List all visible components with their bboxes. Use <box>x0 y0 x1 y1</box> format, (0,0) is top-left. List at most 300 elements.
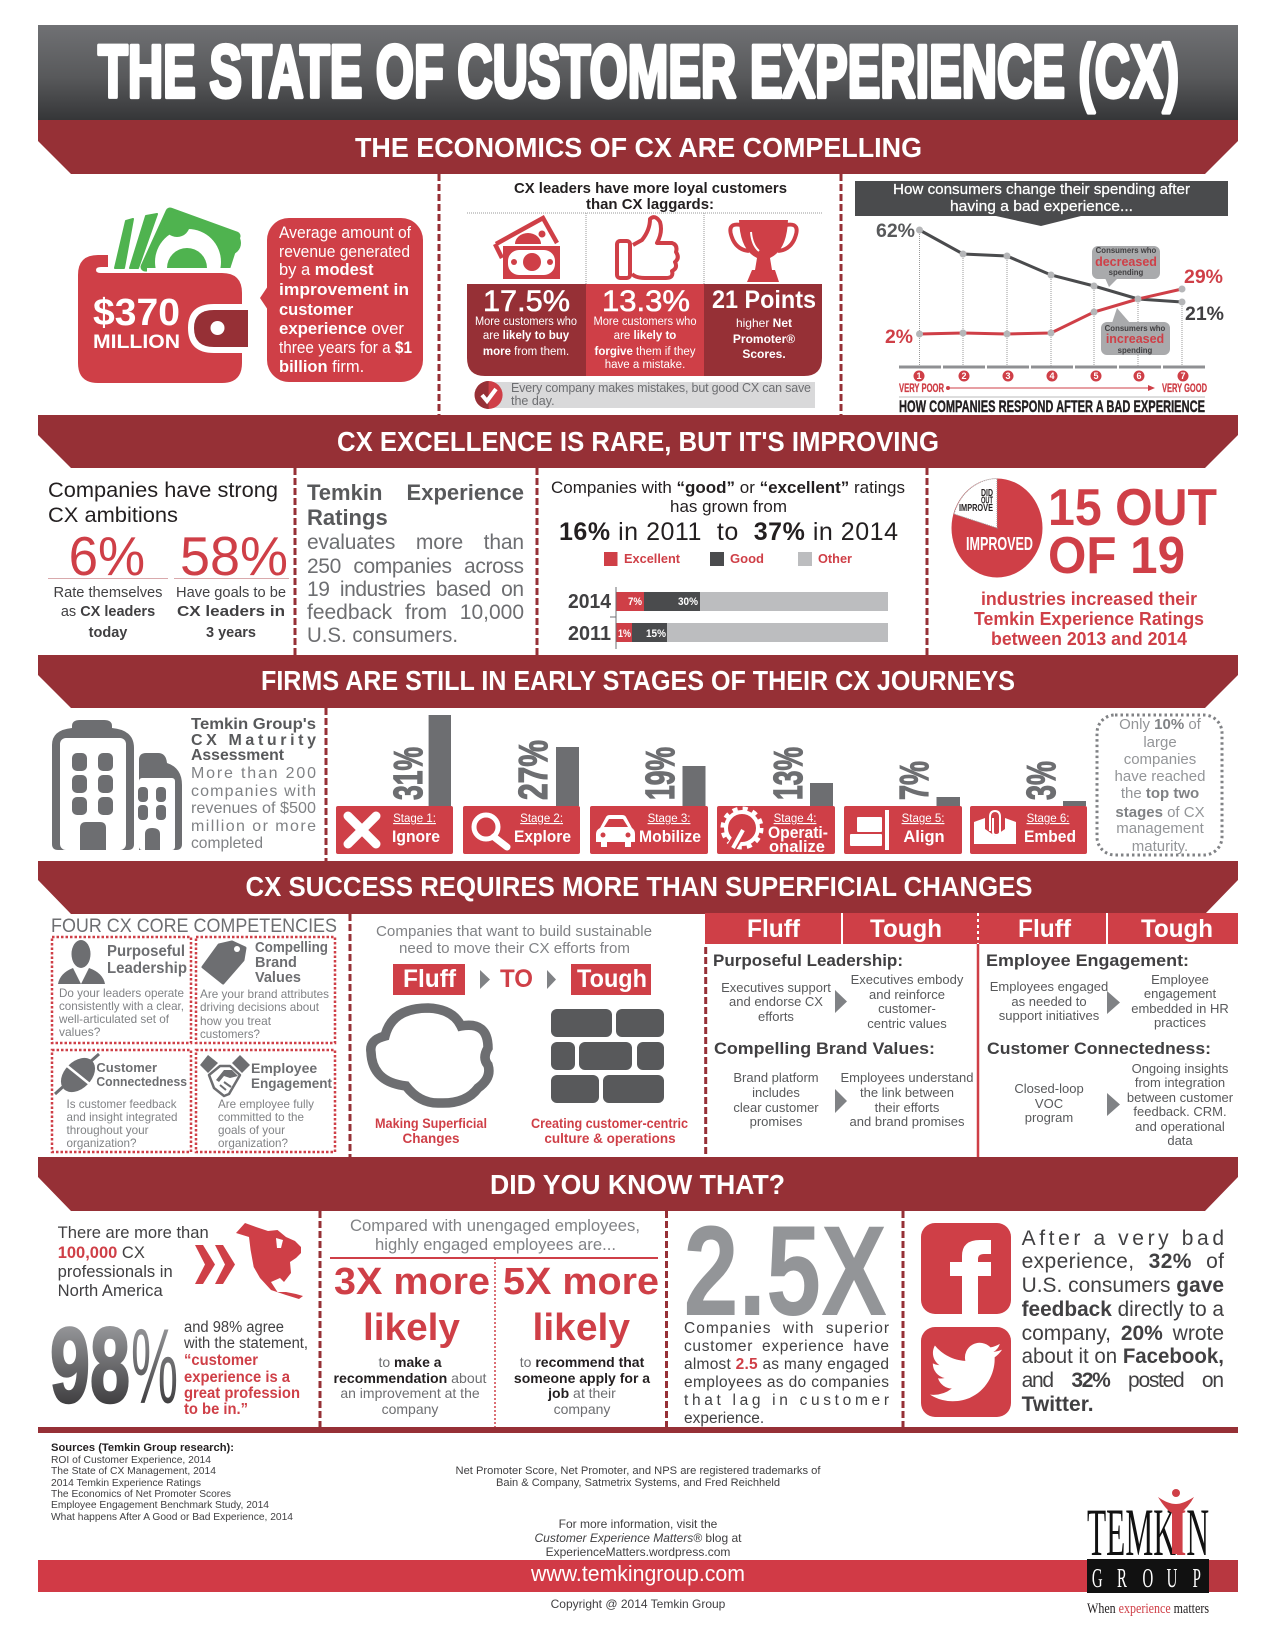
line chart: 2% <box>885 327 913 348</box>
footer: sources: The State of CX Management, 2014 <box>51 1465 216 1477</box>
panel: fluff tough table <box>705 913 1238 1157</box>
chart heading callout: having a bad experience... <box>950 198 1133 215</box>
caption: industries increased their <box>981 589 1197 609</box>
row: compelling brand values <box>714 1039 973 1129</box>
stat block: 17.5 percent <box>467 284 586 376</box>
row: compelling brand values: Compelling Brand Values: <box>714 1039 935 1058</box>
stage 4 operationalize: Operati- <box>768 824 828 842</box>
note: mistakes <box>475 381 815 409</box>
callout: modest improvement: billion firm. <box>279 358 364 376</box>
callout: modest improvement: experience over <box>279 320 405 338</box>
stage 1 ignore: Ignore <box>392 828 440 846</box>
line chart: 29% <box>1184 267 1223 288</box>
icon: trophy <box>730 220 797 282</box>
stat: 6 percent: Rate themselves <box>54 585 162 601</box>
panel: social feedback <box>921 1223 1224 1417</box>
heading: loyal customers: than CX laggards: <box>586 196 714 213</box>
stat block: 17.5 percent: more from them. <box>483 346 569 358</box>
divider <box>926 468 928 655</box>
line chart: 62% <box>876 221 915 242</box>
stat block: 21 points: Scores. <box>742 347 786 361</box>
panel: loyal customers <box>467 180 822 409</box>
panel: fluff to tough <box>371 923 688 1146</box>
callout: top two stages: maturity. <box>1132 838 1188 855</box>
icon: wallet with money: $370 <box>93 292 180 334</box>
footer: sources: ROI of Customer Experience, 2014 <box>51 1454 211 1466</box>
row: customer connectedness: VOC <box>1035 1096 1063 1111</box>
row: compelling brand values: includes <box>752 1085 800 1100</box>
card: compelling brand values: driving decisions about <box>200 1000 320 1014</box>
text: great profession: to be in.” <box>184 1401 248 1418</box>
stat: 3X more likely: to make a <box>378 1354 442 1370</box>
text: social feedback: feedback directly to a <box>1022 1298 1224 1321</box>
fluff to tough label: TO <box>500 965 533 993</box>
heading: ambitions <box>48 479 278 527</box>
table header: Fluff <box>747 915 801 943</box>
stat: 5X more likely: to recommend that <box>520 1354 645 1370</box>
line chart: 7 <box>1180 371 1186 381</box>
panel: spending line chart <box>855 181 1228 416</box>
icon: bricks <box>551 1009 664 1103</box>
icon: twitter <box>921 1327 1011 1417</box>
card: employee engagement <box>196 1050 335 1152</box>
callout: increased spending: Consumers who <box>1105 324 1166 333</box>
heading: engaged employees: highly engaged employees are... <box>375 1236 616 1254</box>
heading: four competencies: FOUR CX CORE COMPETENCIES <box>51 916 337 937</box>
callout: top two stages <box>1097 715 1222 855</box>
panel: ratings bars <box>551 479 905 649</box>
line chart: 5 <box>1093 371 1099 381</box>
row: employee engagement: Employee <box>1151 972 1209 987</box>
text: maturity assessment: CX Maturity <box>191 732 316 749</box>
stat: 6 percent: 6% <box>69 525 145 587</box>
text: 2.5X explanation: experience. <box>684 1410 764 1427</box>
legend: Excellent <box>624 551 681 566</box>
row: employee engagement: embedded in HR <box>1131 1001 1229 1016</box>
stat: 3X more likely <box>334 1261 490 1417</box>
row: customer connectedness: feedback. CRM. <box>1133 1104 1227 1119</box>
stage 6 embed: Embed <box>1024 828 1076 846</box>
stat: 6 percent: as CX leaders <box>61 604 155 620</box>
text: maturity assessment: revenues of $500 <box>191 800 316 817</box>
stat block: 17.5 percent: More customers who <box>475 316 577 328</box>
bar chart: 15% <box>646 628 666 640</box>
stat block: 21 points: Promoter® <box>733 332 795 346</box>
divider <box>840 174 842 415</box>
icon: chevrons <box>195 1245 235 1284</box>
heading: ratings growth: has grown from <box>670 498 787 516</box>
card: purposeful leadership: values? <box>59 1025 101 1039</box>
stat block: 13.3 percent <box>586 284 704 376</box>
logo: Temkin Group: GROUP <box>1092 1563 1201 1593</box>
stat: 3X more likely: an improvement at the <box>340 1385 480 1401</box>
footer: trademark note <box>456 1465 821 1489</box>
footer: sources <box>51 1442 293 1523</box>
row: employee engagement: practices <box>1154 1015 1207 1030</box>
panel: Temkin Experience Ratings: 19 industries based on <box>307 578 524 601</box>
row: purposeful leadership: customer- <box>878 1001 936 1016</box>
footer: trademark note: Net Promoter Score, Net Promoter, and NPS are registered trademarks of <box>456 1465 821 1477</box>
stat: 5X more likely: company <box>554 1401 610 1417</box>
text: great profession: with the statement, <box>183 1335 308 1352</box>
callout: top two stages: Only 10% of <box>1119 716 1202 733</box>
stat: 3X more likely: recommendation about <box>334 1370 487 1386</box>
card: employee engagement: Are employee fully <box>218 1097 314 1111</box>
caption: Temkin Experience Ratings <box>974 609 1204 629</box>
footer: trademark note: Bain & Company, Satmetrix Systems, and Fred Reichheld <box>496 1477 780 1489</box>
card: purposeful leadership <box>52 937 191 1043</box>
callout: modest improvement: improvement in <box>279 281 409 299</box>
divider <box>318 1211 322 1427</box>
bar chart: 7% <box>628 596 642 608</box>
text: social feedback: experience, 32% of <box>1022 1250 1224 1273</box>
stat: 5X more likely: likely <box>532 1307 630 1349</box>
text: maturity assessment: million or more <box>191 818 316 835</box>
section banner: excellence: CX EXCELLENCE IS RARE, BUT IT'S IMPROVING <box>337 426 939 457</box>
callout: decreased spending <box>1092 246 1160 287</box>
stage 2 explore: 27% <box>510 740 556 800</box>
bar chart: 2014 <box>568 591 612 613</box>
note: mistakes: Every company makes mistakes, but good CX can save <box>511 381 811 395</box>
row: customer connectedness: Customer Connectedness: <box>987 1039 1211 1058</box>
row: customer connectedness: Closed-loop <box>1014 1081 1084 1096</box>
pie chart <box>952 478 1042 578</box>
row: employee engagement: Employee Engagement: <box>986 951 1189 970</box>
row: employee engagement: as needed to <box>1011 994 1087 1009</box>
text: great profession: “customer <box>184 1352 258 1369</box>
callout: decreased spending: Consumers who <box>1096 246 1157 255</box>
row: purposeful leadership: Executives support <box>721 980 831 995</box>
callout: increased spending: spending <box>1118 346 1153 355</box>
stat: 58 percent: 58% <box>180 525 288 587</box>
captions: Creating customer-centric <box>531 1116 688 1131</box>
captions <box>375 1116 688 1146</box>
card: customer connectedness: throughout your <box>66 1123 148 1137</box>
line chart: 4 <box>1049 371 1055 381</box>
text: social feedback: U.S. consumers gave <box>1022 1274 1224 1297</box>
text: great profession <box>183 1319 308 1418</box>
stage 3 mobilize <box>590 747 708 854</box>
card: customer connectedness: Connectedness <box>96 1074 187 1089</box>
text: social feedback: company, 20% wrote <box>1022 1322 1224 1345</box>
row: compelling brand values: the link between <box>860 1085 954 1100</box>
text: great profession: and 98% agree <box>184 1319 284 1336</box>
row: purposeful leadership: Purposeful Leadership: <box>713 951 903 970</box>
callout: top two stages: large <box>1143 734 1177 751</box>
divider <box>348 914 352 1157</box>
pie chart: IMPROVED <box>966 534 1033 554</box>
card: purposeful leadership: Do your leaders operate <box>59 986 184 1000</box>
stat block: 21 points <box>704 284 822 376</box>
panel: 15 out of 19 <box>952 478 1217 649</box>
card: compelling brand values: customers? <box>200 1027 260 1041</box>
card: customer connectedness: Customer <box>96 1060 157 1075</box>
bar chart: 1% <box>618 628 631 640</box>
stat block: 13.3 percent: More customers who <box>594 316 696 328</box>
note: mistakes: the day. <box>511 394 555 408</box>
divider <box>536 468 538 655</box>
chart heading callout: How consumers change their spending after <box>893 181 1190 198</box>
callout: decreased spending: decreased <box>1095 255 1157 269</box>
stat: 2.5X: 2.5X <box>684 1200 887 1343</box>
pie chart: IMPROVE <box>959 503 993 514</box>
text: social feedback: about it on Facebook, <box>1022 1345 1224 1368</box>
card: customer connectedness: organization? <box>66 1136 137 1150</box>
panel: engaged employees <box>330 1217 659 1427</box>
row: customer connectedness <box>987 1039 1234 1148</box>
row: customer connectedness: and operational <box>1135 1119 1225 1134</box>
text: sustainable intro <box>376 923 652 957</box>
text: social feedback: Twitter. <box>1022 1393 1094 1416</box>
callout: modest improvement: customer <box>279 301 354 319</box>
heading: loyal customers <box>514 180 787 213</box>
text: professionals: professionals in <box>58 1263 173 1281</box>
heading: ratings growth <box>551 479 905 546</box>
line chart: 6 <box>1136 371 1142 381</box>
text: 2.5X explanation: Companies with superior <box>684 1320 889 1337</box>
stat block: 13.3 percent: are likely to <box>614 330 676 342</box>
text: maturity assessment: More than 200 <box>191 765 316 782</box>
row: customer connectedness: data <box>1167 1133 1193 1148</box>
icon: money <box>495 218 560 279</box>
section banner: economics <box>38 120 1238 174</box>
pie chart: DID <box>981 488 993 499</box>
text: maturity assessment: companies with <box>191 783 316 800</box>
row: purposeful leadership: efforts <box>758 1009 794 1024</box>
section banner: economics: THE ECONOMICS OF CX ARE COMPELLING <box>355 132 922 163</box>
divider <box>665 1211 668 1427</box>
text: 2.5X explanation <box>684 1320 889 1427</box>
text: 2.5X explanation: that lag in customer <box>684 1392 889 1409</box>
stat: 58 percent: CX leaders in <box>177 604 285 620</box>
card: purposeful leadership: Purposeful <box>107 943 185 960</box>
card: customer connectedness: Is customer feedback <box>66 1097 177 1111</box>
icon: cloud <box>371 1008 489 1103</box>
stage 3 mobilize: Mobilize <box>639 828 701 846</box>
big stat: 15 OUT <box>1048 479 1217 537</box>
section banner: did you know <box>38 1157 1238 1211</box>
panel: Temkin Experience Ratings: Ratings <box>307 505 388 530</box>
row: compelling brand values: Brand platform <box>733 1070 819 1085</box>
row: employee engagement <box>986 951 1229 1030</box>
icon: facebook <box>921 1223 1011 1314</box>
callout: modest improvement: Average amount of <box>279 224 411 242</box>
footer: sources: What happens After A Good or Bad Experience, 2014 <box>51 1511 293 1523</box>
bar chart <box>568 587 888 649</box>
text: social feedback: After a very bad <box>1022 1227 1224 1250</box>
card: purposeful leadership: well-articulated set of <box>58 1012 170 1026</box>
panel: CX professionals: % <box>131 1306 178 1426</box>
stat block: 13.3 percent: have a mistake. <box>605 359 685 371</box>
section banner: did you know: DID YOU KNOW THAT? <box>490 1169 785 1200</box>
stage 1 ignore: Stage 1: <box>393 813 436 825</box>
stage 3 mobilize: Stage 3: <box>648 813 690 825</box>
table header: Fluff <box>1018 915 1072 943</box>
card: purposeful leadership: Leadership <box>107 960 187 977</box>
callout: top two stages: stages of CX <box>1115 804 1205 821</box>
row: customer connectedness: between customer <box>1127 1090 1234 1105</box>
stat: 3X more likely: 3X more <box>334 1261 490 1303</box>
divider <box>294 468 296 655</box>
callout: increased spending: increased <box>1106 332 1164 346</box>
card: compelling brand values: Brand <box>255 955 297 971</box>
stat: 58 percent: Have goals to be <box>176 585 286 601</box>
stat block: 21 points: higher Net <box>736 316 792 330</box>
line chart: 1 <box>916 371 922 381</box>
panel: CX ambitions <box>48 479 289 641</box>
stage 6 embed <box>970 761 1087 854</box>
table header: Tough <box>1141 915 1213 943</box>
text: social feedback: and 32% posted on <box>1022 1369 1224 1392</box>
callout: decreased spending: spending <box>1109 268 1144 277</box>
text: 2.5X explanation: employees as do companies <box>684 1374 889 1391</box>
row: employee engagement: Employees engaged <box>990 979 1108 994</box>
card: customer connectedness <box>52 1050 191 1152</box>
stage 4 operationalize: Stage 4: <box>774 813 816 825</box>
callout: increased spending <box>1101 308 1170 355</box>
logo: Temkin Group: TEMKIN <box>1087 1494 1209 1570</box>
stat: 5X more likely: someone apply for a <box>514 1370 650 1386</box>
panel: maturity assessment <box>52 716 316 852</box>
footer: more information: Customer Experience Matters® blog at <box>535 1531 742 1545</box>
text: maturity assessment: Temkin Group's <box>191 716 316 733</box>
row: purposeful leadership: and endorse CX <box>729 994 823 1009</box>
divider <box>438 174 440 415</box>
callout: top two stages: management <box>1116 820 1205 837</box>
legend <box>604 551 852 566</box>
heading: loyal customers: CX leaders have more loyal customers <box>514 180 787 197</box>
legend: Other <box>818 551 852 566</box>
card: compelling brand values <box>196 937 335 1043</box>
line chart: 2 <box>961 371 967 381</box>
callout: top two stages: the top two <box>1121 785 1199 802</box>
captions: Making Superficial <box>375 1116 487 1131</box>
logo: Temkin Group <box>1087 1489 1209 1617</box>
axis labels: VERY POOR <box>899 381 944 395</box>
footer bar: www.temkingroup.com <box>530 1561 745 1586</box>
card: employee engagement: goals of your <box>218 1123 285 1137</box>
section banner: firms: FIRMS ARE STILL IN EARLY STAGES OF THEIR CX JOURNEYS <box>261 665 1015 696</box>
stat: 98 percent: 98 <box>50 1305 130 1425</box>
stage 1 ignore: 31% <box>385 747 431 800</box>
section banner: firms <box>38 655 1238 708</box>
card: employee engagement: Engagement <box>251 1075 332 1091</box>
line chart: 21% <box>1185 304 1224 325</box>
text: 2.5X explanation: customer experience have <box>684 1338 889 1355</box>
icon: buildings <box>52 720 182 850</box>
text: professionals: There are more than <box>58 1224 209 1242</box>
table header <box>705 913 1238 944</box>
heading: ambitions: CX ambitions <box>48 504 178 527</box>
stat: 5X more likely <box>503 1261 659 1417</box>
row: purposeful leadership: and reinforce <box>869 987 945 1002</box>
stage 4 operationalize <box>717 747 835 856</box>
captions: culture & operations <box>544 1131 676 1146</box>
row: compelling brand values: and brand promises <box>850 1114 965 1129</box>
stat block: 17.5 percent: are likely to buy <box>483 330 570 342</box>
text: great profession: experience is a <box>184 1369 290 1386</box>
stat block: 17.5 percent: 17.5% <box>483 285 570 318</box>
panel: CX professionals <box>50 1223 308 1426</box>
fluff to tough label <box>393 964 651 995</box>
fluff to tough label: Fluff <box>403 965 457 993</box>
bar chart: 2011 <box>568 623 611 645</box>
stat: 5X more likely: job at their <box>547 1385 616 1401</box>
callout: modest improvement: three years for a $1 <box>279 339 412 357</box>
text: maturity assessment <box>191 716 316 852</box>
callout: top two stages: companies <box>1124 751 1196 768</box>
panel: wallet revenue <box>78 211 423 383</box>
stat: 58 percent <box>174 525 289 641</box>
panel: Temkin Experience Ratings: Temkin Experience <box>307 480 524 505</box>
callout: modest improvement <box>260 218 423 382</box>
footer: sources: Sources (Temkin Group research): <box>51 1442 234 1454</box>
panel: Temkin Experience Ratings <box>307 480 524 647</box>
line chart <box>876 221 1224 382</box>
footer: more information: For more information, visit the <box>559 1517 718 1531</box>
stage 1 ignore <box>336 715 453 854</box>
card: purposeful leadership: consistently with a clear, <box>59 999 184 1013</box>
card: employee engagement: committed to the <box>218 1110 304 1124</box>
logo: Temkin Group: When experience matters <box>1087 1601 1209 1617</box>
panel: Temkin Experience Ratings: 250 companies across <box>307 555 524 578</box>
row: compelling brand values: their efforts <box>875 1100 940 1115</box>
big stat: OF 19 <box>1048 527 1185 585</box>
section banner: excellence <box>38 415 1238 468</box>
stat: 5X more likely: 5X more <box>503 1261 659 1303</box>
big stat <box>1048 479 1217 585</box>
row: compelling brand values: promises <box>750 1114 803 1129</box>
text: social feedback <box>1022 1227 1224 1416</box>
stage 2 explore <box>463 740 580 854</box>
stage 5 align: Align <box>903 828 945 846</box>
footer: sources: 2014 Temkin Experience Ratings <box>51 1477 201 1489</box>
row: employee engagement: support initiatives <box>999 1008 1100 1023</box>
card: compelling brand values: how you treat <box>200 1014 272 1028</box>
fluff to tough label: Tough <box>577 965 647 993</box>
stage 5 align: 7% <box>891 761 937 800</box>
table header: Tough <box>870 915 942 943</box>
row: employee engagement: engagement <box>1144 986 1217 1001</box>
stat: 58 percent: 3 years <box>206 625 256 641</box>
icon: north america map <box>236 1223 303 1299</box>
row: purposeful leadership: centric values <box>867 1016 947 1031</box>
card: employee engagement: organization? <box>218 1136 288 1150</box>
divider <box>324 708 328 861</box>
section banner: success: CX SUCCESS REQUIRES MORE THAN SUPERFICIAL CHANGES <box>246 871 1032 902</box>
stage 4 operationalize: 13% <box>765 747 811 800</box>
callout: modest improvement: by a modest <box>279 261 374 279</box>
text: maturity assessment: completed <box>191 835 263 852</box>
text: professionals <box>58 1224 209 1300</box>
card: compelling brand values: Compelling <box>255 940 328 956</box>
heading: engaged employees: Compared with unengaged employees, <box>350 1217 640 1235</box>
stage 5 align <box>844 761 962 854</box>
bottom rule <box>38 1427 1238 1433</box>
stat: 6 percent: today <box>89 625 127 641</box>
chart heading callout <box>855 181 1228 226</box>
heading: engaged employees <box>350 1217 640 1254</box>
line chart: 3 <box>1005 371 1011 381</box>
stat: 6 percent <box>48 525 168 641</box>
callout: modest improvement: revenue generated <box>279 243 410 261</box>
row: compelling brand values: clear customer <box>733 1100 819 1115</box>
divider <box>902 1211 904 1427</box>
text: 2.5X explanation: almost 2.5 as many engaged <box>684 1356 889 1373</box>
heading: ratings growth: 16% in 2011 to 37% in 2014 <box>559 518 898 546</box>
row: customer connectedness: Ongoing insights <box>1132 1061 1229 1076</box>
text: sustainable intro: Companies that want to build sustainable <box>376 923 652 940</box>
